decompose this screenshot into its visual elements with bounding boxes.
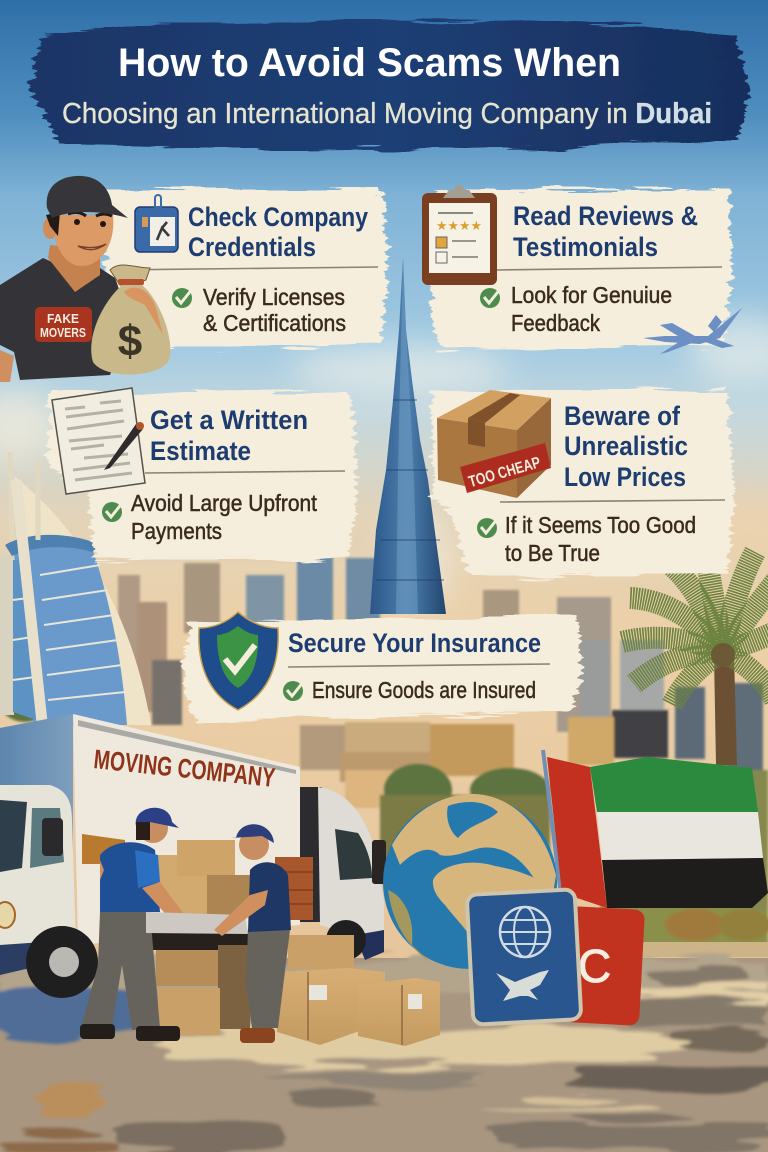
mover right: [214, 824, 291, 1043]
cargo front: [0, 714, 73, 950]
panel: get a written estimate: Payments: [131, 518, 222, 544]
red passport: C: [578, 940, 611, 992]
icon: clipboard: [422, 185, 497, 285]
panel: secure your insurance: [182, 612, 582, 722]
icon: check: [477, 518, 498, 538]
panel: get a written estimate: [48, 388, 358, 560]
mover left: [80, 808, 192, 1041]
left wheel: [26, 926, 98, 998]
character: fake mover with money bag: [0, 176, 170, 382]
north sea: [447, 802, 498, 838]
heading: Read Reviews &: [513, 201, 698, 231]
panel: read reviews and testimonials: [422, 185, 733, 350]
panel: beware of unrealistic low prices: [432, 390, 734, 578]
panel: beware of unrealistic low prices: Unrealistic: [564, 431, 688, 461]
title banner: [30, 19, 750, 150]
cargo side: [73, 714, 300, 945]
UAE flag: [543, 750, 768, 908]
blue passport: [467, 889, 581, 1025]
icon: too cheap box: [437, 390, 551, 498]
money bag: [91, 265, 170, 375]
cap: [47, 176, 128, 218]
icon: airplane: [643, 308, 742, 354]
arm: [0, 350, 14, 382]
panel: read reviews and testimonials: Testimonials: [513, 232, 658, 262]
icon: check: [102, 502, 123, 522]
americas: [388, 890, 430, 962]
shirt: [0, 258, 122, 380]
africa: [433, 863, 547, 948]
heading line 2: Choosing an International Moving Company in Dubai: [62, 98, 712, 130]
icon: document and pen: [52, 388, 145, 494]
label: fake movers: FAKE: [47, 311, 79, 326]
cardboard boxes: [150, 840, 440, 1046]
panel: check company credentials: [105, 190, 388, 350]
landmark: Burj Al Arab: [0, 452, 151, 725]
trees behind: [0, 678, 768, 945]
label: fake movers: [35, 307, 92, 342]
panel: get a written estimate: Estimate: [150, 436, 251, 466]
clouds: [0, 316, 768, 610]
heading: Secure Your Insurance: [288, 628, 541, 658]
heading line 1: How to Avoid Scams When: [118, 41, 621, 85]
carried box: [146, 912, 248, 934]
icon: clipboard: ★★★★: [436, 218, 482, 233]
label: fake movers: MOVERS: [40, 325, 86, 340]
panel: beware of unrealistic low prices: to Be True: [505, 540, 600, 566]
panel: check company credentials: Credentials: [188, 232, 316, 262]
ground: [0, 942, 768, 1152]
icon: check: [480, 288, 501, 308]
panel: read reviews and testimonials: Feedback: [511, 310, 600, 336]
body text: Look for Genuiue: [511, 282, 672, 308]
money bag: $: [118, 317, 142, 366]
body text: Ensure Goods are Insured: [312, 677, 536, 703]
landmark: Burj Khalifa tower: [370, 258, 446, 614]
red passport: [563, 906, 645, 1026]
icon: ID badge: [135, 195, 178, 252]
heading: Beware of: [564, 401, 681, 431]
truck lettering: MOVING COMPANY: [92, 744, 277, 793]
icon: check: [283, 681, 304, 701]
hand: [124, 288, 163, 335]
left cab: [0, 785, 76, 960]
right wheel: [326, 920, 366, 960]
banner brush stroke: [30, 19, 750, 150]
heading: Get a Written: [150, 405, 308, 435]
price tag: TOO CHEAP: [467, 454, 543, 491]
palm tree: [622, 550, 768, 765]
right cab: [300, 787, 322, 922]
body text: Verify Licenses: [203, 284, 345, 310]
moving truck: [0, 714, 386, 998]
globe: [383, 794, 557, 969]
icon: shield: [199, 612, 278, 710]
sail: [14, 476, 151, 725]
passports: [467, 889, 645, 1026]
panel: beware of unrealistic low prices: Low Prices: [564, 462, 686, 492]
icon: check: [172, 288, 193, 308]
heading: Check Company: [188, 202, 368, 232]
movers: [80, 808, 291, 1043]
neck and face: [48, 245, 100, 292]
panel: check company credentials: & Certifications: [203, 310, 346, 336]
body text: Avoid Large Upfront: [131, 490, 318, 516]
stacked boxes behind movers: [157, 855, 207, 895]
city skyline: [0, 550, 768, 945]
body text: If it Seems Too Good: [505, 512, 696, 538]
polar and northern land: [392, 794, 556, 900]
